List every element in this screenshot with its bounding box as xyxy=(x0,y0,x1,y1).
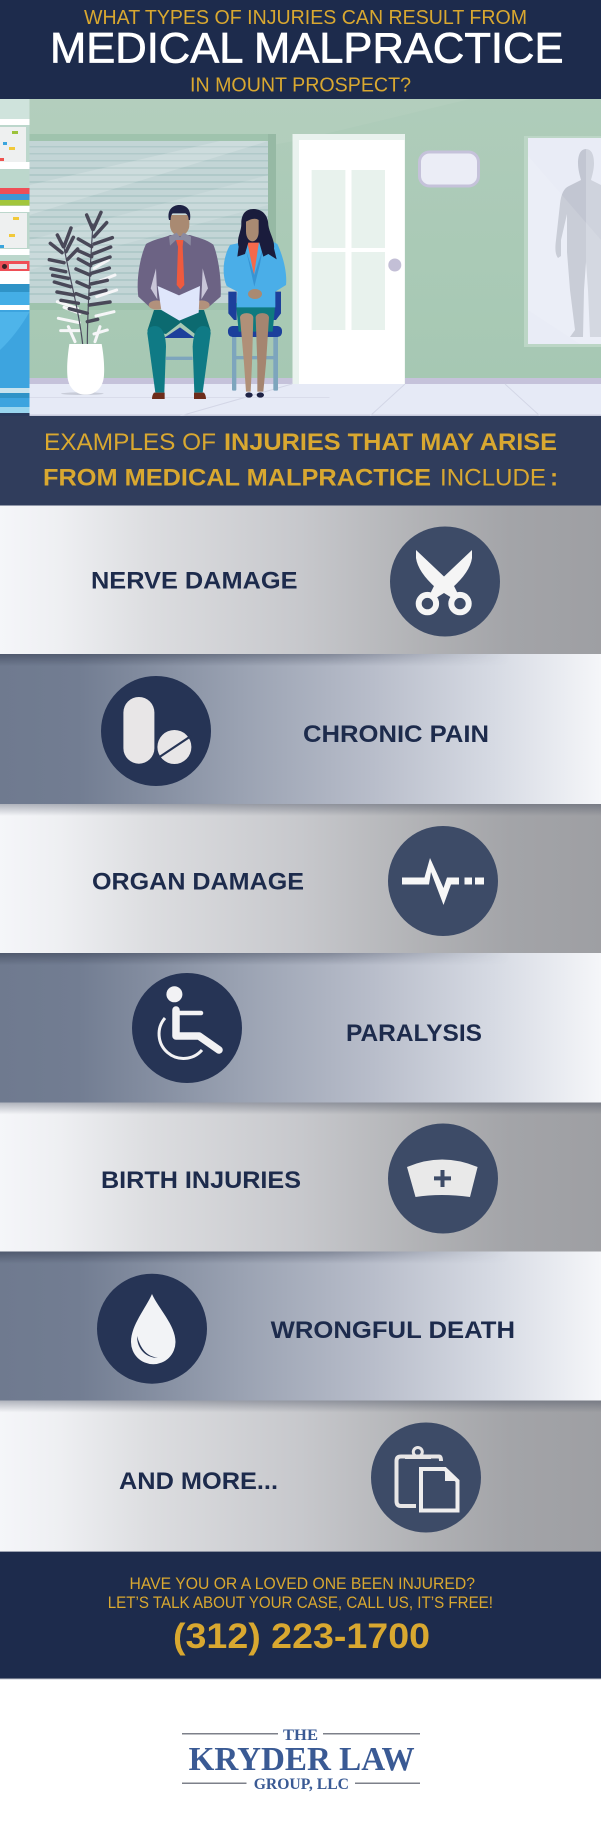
sub heading line two: INCLUDE xyxy=(440,465,546,492)
woman seated in blue jacket xyxy=(224,209,286,398)
sub heading line two: FROM MEDICAL MALPRACTICE xyxy=(43,465,431,492)
label: chronic pain: CHRONIC PAIN xyxy=(303,721,489,748)
sub heading line one xyxy=(44,429,557,456)
row: organ damage xyxy=(0,804,601,953)
window with blinds xyxy=(30,134,276,310)
call to action panel xyxy=(0,1552,601,1679)
row: and more xyxy=(0,1400,601,1552)
sub heading panel xyxy=(0,416,601,506)
icon: clipboard and document xyxy=(371,1422,481,1532)
row: chronic pain xyxy=(0,654,601,804)
heading line: in mount prospect: IN MOUNT PROSPECT? xyxy=(190,73,411,96)
wall plate xyxy=(420,152,478,186)
label: wrongful death: WRONGFUL DEATH xyxy=(271,1317,515,1344)
label: birth injuries: BIRTH INJURIES xyxy=(101,1167,301,1194)
label: nerve damage: NERVE DAMAGE xyxy=(91,568,298,595)
phone number: (312) 223-1700 xyxy=(173,1616,430,1656)
logo: the kryder law group xyxy=(182,1727,420,1793)
sub heading line one: EXAMPLES OF xyxy=(44,429,216,456)
sub heading line two: : xyxy=(550,465,558,492)
anatomy poster xyxy=(524,136,601,347)
label: paralysis: PARALYSIS xyxy=(346,1020,482,1047)
logo line: group llc: GROUP, LLC xyxy=(254,1776,349,1793)
icon: scissors xyxy=(390,526,500,636)
label: organ damage: ORGAN DAMAGE xyxy=(92,868,304,896)
row: birth injuries xyxy=(0,1102,601,1252)
man seated with paper xyxy=(138,205,221,399)
row: paralysis xyxy=(0,953,601,1103)
icon: wheelchair xyxy=(132,973,242,1083)
call to action line two: LET’S TALK ABOUT YOUR CASE, CALL US, IT’S FREE! xyxy=(108,1594,493,1612)
row: nerve damage xyxy=(0,506,601,654)
plant xyxy=(49,212,117,395)
baseboard xyxy=(30,378,601,384)
left shelving xyxy=(0,99,30,416)
icon: drop xyxy=(97,1274,207,1384)
main title: MEDICAL MALPRACTICE xyxy=(50,25,564,73)
icon: pills xyxy=(101,676,211,786)
illustration: waiting room xyxy=(0,99,601,416)
logo line: kryder law: KRYDER LAW xyxy=(189,1741,415,1778)
icon: heartbeat pulse xyxy=(388,826,498,936)
header panel xyxy=(0,0,601,100)
floor xyxy=(30,384,601,416)
sub heading line one: INJURIES THAT MAY ARISE xyxy=(224,429,557,456)
label: and more: AND MORE... xyxy=(119,1468,278,1495)
logo line: the: THE xyxy=(283,1727,318,1744)
icon: nurse cap xyxy=(388,1124,498,1234)
door xyxy=(292,134,405,384)
scene figures drawn at 3x coordinates xyxy=(49,205,286,399)
heading line: what types of injuries: WHAT TYPES OF INJURIES CAN RESULT FROM xyxy=(84,6,527,29)
row: wrongful death xyxy=(0,1252,601,1400)
call to action line one: HAVE YOU OR A LOVED ONE BEEN INJURED? xyxy=(130,1575,475,1593)
wall xyxy=(30,99,601,379)
